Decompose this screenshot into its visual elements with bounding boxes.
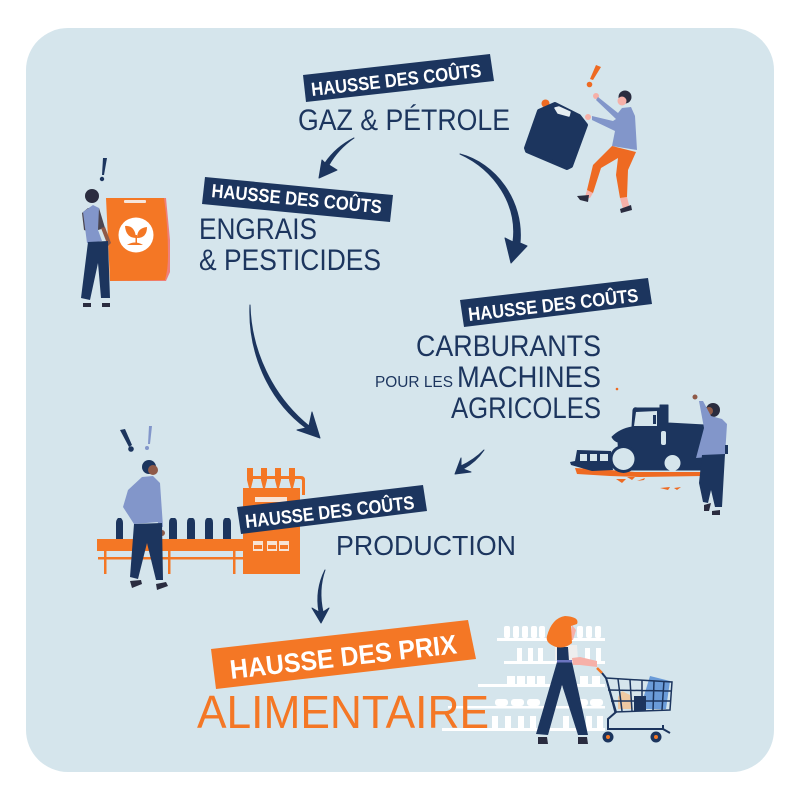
text: engrais et pesticides: ENGRAIS bbox=[199, 213, 317, 246]
icon: bottling machine bbox=[243, 468, 305, 574]
text: production: PRODUCTION bbox=[336, 530, 516, 561]
arrow: carburants to production bbox=[455, 450, 484, 474]
illustration: man with fertilizer bag bbox=[81, 158, 170, 307]
text: carburants pour les machines agricoles: MACHINES bbox=[457, 361, 601, 394]
heading tag: hausse des prix: HAUSSE DES PRIX bbox=[228, 629, 458, 685]
icon: tractor bbox=[570, 388, 705, 490]
illustration: factory line bbox=[97, 426, 305, 590]
illustration: tractor and farmer bbox=[570, 388, 728, 515]
block: hausse des prix alimentaire bbox=[197, 620, 489, 738]
icon: fertilizer bag bbox=[106, 198, 170, 281]
arrow: engrais to production bbox=[250, 305, 320, 438]
illustration: man with jerrycan bbox=[526, 65, 637, 213]
arrow: gaz to engrais bbox=[319, 138, 354, 178]
heading tag: hausse des coûts 1: HAUSSE DES COÛTS bbox=[310, 60, 482, 101]
icon: exclamation mark navy bbox=[100, 158, 107, 181]
figure: man watching bbox=[123, 460, 168, 590]
icon: jerrycan bbox=[526, 100, 586, 168]
heading tag: hausse des coûts 2: HAUSSE DES COÛTS bbox=[211, 180, 383, 218]
heading tag: hausse des coûts 4: HAUSSE DES COÛTS bbox=[244, 492, 415, 533]
icon: conveyor belt bbox=[97, 539, 244, 574]
figure: man from behind bbox=[81, 189, 111, 307]
text: carburants pour les machines agricoles: AGRICOLES bbox=[451, 392, 601, 425]
illustration: supermarket shelves bbox=[442, 626, 605, 731]
text: alimentaire: ALIMENTAIRE bbox=[197, 686, 489, 738]
arrow: gaz to carburants bbox=[460, 154, 527, 263]
text: engrais et pesticides: & PESTICIDES bbox=[199, 244, 381, 277]
icon: shopping cart bbox=[597, 668, 672, 742]
block: production bbox=[237, 485, 516, 561]
block: gaz et pétrole bbox=[298, 54, 510, 137]
figure: woman bbox=[536, 616, 597, 744]
text: carburants pour les machines agricoles: CARBURANTS bbox=[416, 330, 601, 363]
figure: man pushing bbox=[577, 90, 637, 213]
icon: exclamation marks bbox=[120, 426, 152, 452]
illustration: woman with shopping cart bbox=[536, 616, 672, 744]
heading tag: hausse des coûts 3: HAUSSE DES COÛTS bbox=[467, 285, 639, 326]
text: gaz et pétrole: GAZ & PÉTROLE bbox=[298, 104, 510, 137]
arrow: production to alimentaire bbox=[312, 570, 329, 623]
block: carburants bbox=[375, 278, 652, 425]
block: engrais et pesticides bbox=[199, 177, 393, 277]
icon: bottles bbox=[116, 518, 231, 539]
text: carburants pour les machines agricoles: POUR LES bbox=[375, 374, 453, 391]
icon: exclamation mark orange bbox=[587, 65, 601, 87]
figure: farmer pointing bbox=[692, 394, 728, 515]
